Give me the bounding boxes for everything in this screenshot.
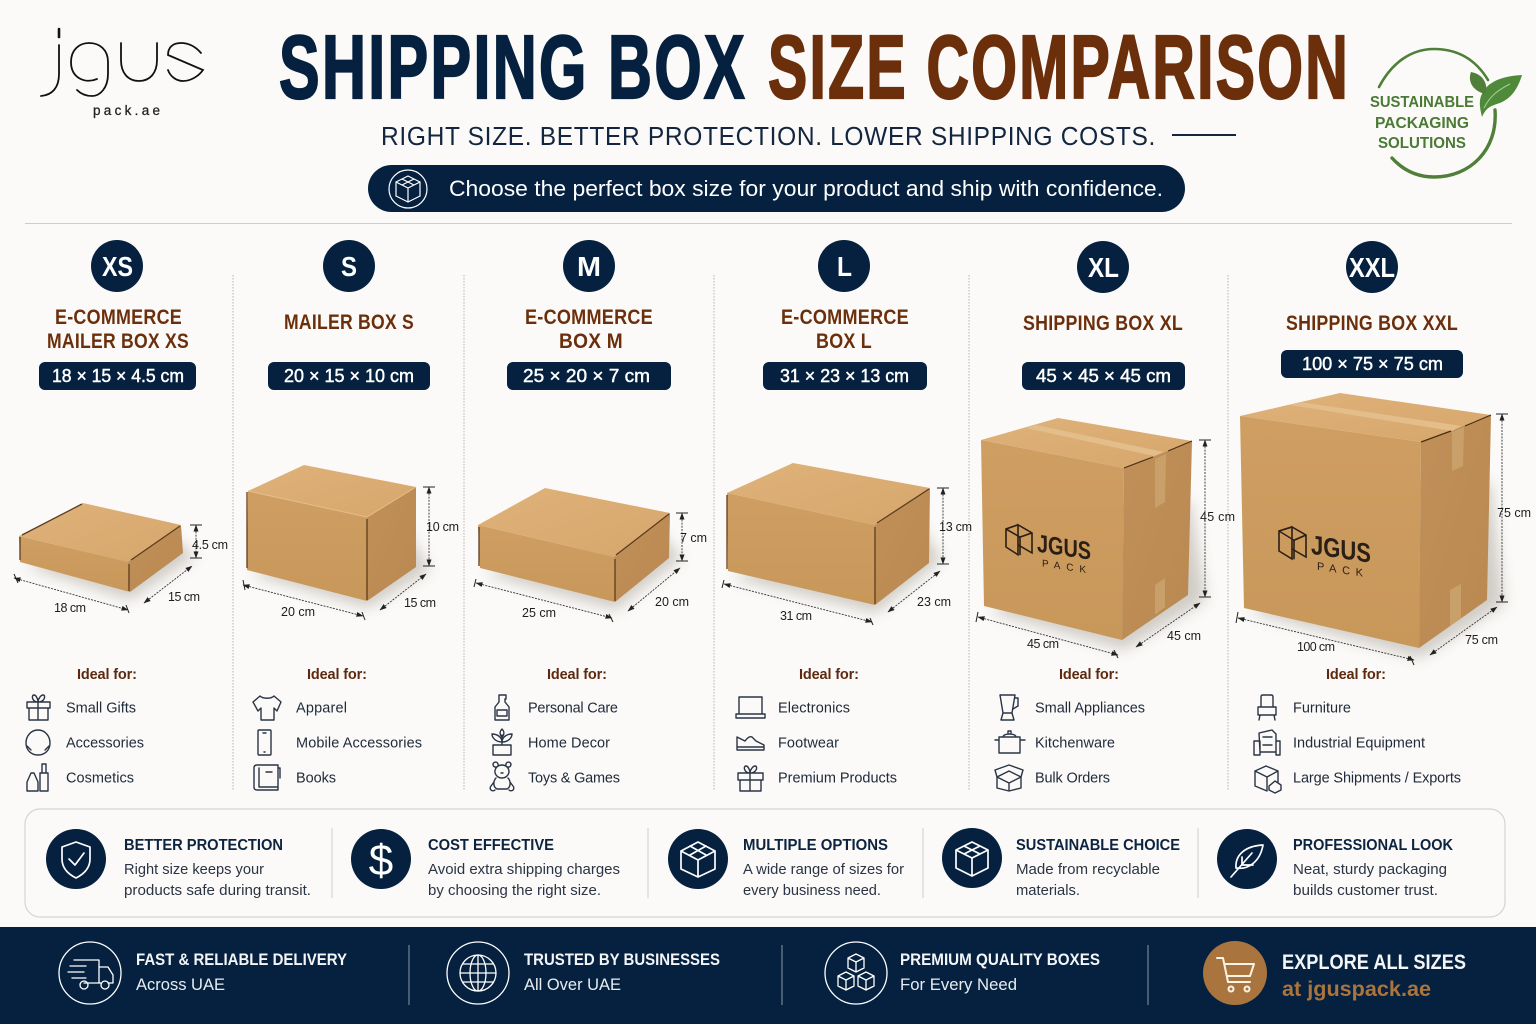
benefit: cost effective: $ (369, 836, 393, 885)
heading XS: E-COMMERCE (55, 306, 182, 329)
icon: shipment boxes (1255, 766, 1281, 793)
icon: t-shirt (253, 696, 281, 720)
title (279, 18, 1350, 118)
ideal for list XS: Cosmetics (66, 770, 134, 786)
panel: S (243, 240, 459, 790)
dimensions pill XL (1022, 362, 1185, 390)
dimensions pill M: 25 × 20 × 7 cm (523, 366, 650, 386)
box XXL: 75 cm (1497, 506, 1531, 520)
panel: XS (14, 240, 228, 791)
ideal for list XS (26, 667, 144, 791)
ideal for list S: Apparel (296, 700, 347, 716)
icon: necklace (26, 730, 50, 755)
benefit: multiple options (668, 829, 904, 899)
footer: delivery: FAST & RELIABLE DELIVERY (136, 950, 348, 969)
footer: delivery: Across UAE (136, 975, 225, 994)
box logo: JGUS (1311, 529, 1371, 569)
logo: jgus pack.ae: pack.ae (93, 103, 160, 118)
panel: L (722, 240, 972, 791)
benefit: cost effective: Avoid extra shipping charges (428, 861, 620, 878)
title: SHIPPING BOX (279, 18, 747, 118)
box S: 20 cm (281, 605, 315, 619)
icon: industrial equipment (1254, 730, 1280, 755)
ideal for list L: Premium Products (778, 770, 897, 786)
benefit: multiple options: MULTIPLE OPTIONS (743, 837, 888, 854)
icon: gift (27, 695, 50, 720)
eco badge: sustainable packaging solutions (1370, 49, 1522, 177)
ideal for list XXL: Large Shipments / Exports (1293, 770, 1461, 786)
icon: box in circle (389, 170, 427, 208)
heading XS (47, 306, 189, 353)
benefit: professional look: builds customer trust. (1293, 882, 1438, 899)
icon: bottle (495, 695, 509, 720)
icon: blender (1000, 695, 1018, 720)
panel: XXL (1236, 241, 1531, 793)
panel: benefits (25, 809, 1505, 917)
box L: 31 cm (780, 609, 812, 623)
tagline pill: Choose the perfect box size for your product and ship with confidence. (449, 176, 1163, 201)
ideal for list XS: Ideal for: (77, 667, 137, 683)
subtitle: RIGHT SIZE. BETTER PROTECTION. LOWER SHIPPING COSTS. (381, 121, 1156, 151)
box XXL (1236, 393, 1531, 665)
icon: book (254, 765, 280, 790)
heading L: E-COMMERCE (781, 306, 909, 329)
box XXL: 75 cm (1465, 633, 1498, 647)
footer bar (0, 927, 1536, 1024)
box M (474, 488, 707, 622)
heading XS: MAILER BOX XS (47, 330, 189, 353)
ideal for list M (490, 667, 620, 791)
size badge L (818, 240, 870, 292)
icon: potted plant (492, 729, 512, 755)
ideal for list L: Electronics (778, 700, 850, 716)
icon: shoe (737, 737, 764, 750)
dimensions pill XL: 45 × 45 × 45 cm (1036, 366, 1171, 386)
icon: laptop (736, 697, 765, 718)
benefit: cost effective: by choosing the right size. (428, 882, 601, 899)
box S: 10 cm (426, 520, 459, 534)
ideal for list S (253, 667, 422, 790)
box S (243, 465, 459, 620)
benefit: cost effective: COST EFFECTIVE (428, 837, 554, 854)
dimensions pill M (507, 362, 671, 390)
box logo: PACK (1042, 558, 1086, 576)
box logo: JGUS (1037, 530, 1091, 566)
benefit: cost effective (351, 829, 620, 899)
icon: phone (258, 730, 271, 755)
ideal for list XXL (1254, 667, 1461, 793)
ideal for list S: Mobile Accessories (296, 736, 422, 752)
benefit: professional look: Neat, sturdy packaging (1293, 861, 1447, 878)
box XS: 4.5 cm (192, 538, 228, 552)
benefit: sustainable choice (942, 828, 1180, 899)
ideal for list M: Ideal for: (547, 667, 607, 683)
ideal for list XL: Ideal for: (1059, 667, 1119, 683)
ideal for list XS: Accessories (66, 736, 144, 752)
benefit: better protection: products safe during transit. (124, 882, 311, 899)
heading M: BOX M (559, 330, 623, 353)
icon: cosmetics (27, 764, 48, 791)
box S: 15 cm (404, 596, 436, 610)
box M: 7 cm (680, 531, 707, 545)
ideal for list M: Toys & Games (528, 770, 620, 786)
heading L (781, 306, 909, 353)
box XL: 45 cm (1027, 637, 1059, 651)
footer: delivery (59, 942, 348, 1004)
ideal for list XXL: Furniture (1293, 700, 1351, 716)
footer: globe: TRUSTED BY BUSINESSES (524, 950, 720, 969)
dimensions pill XS: 18 × 15 × 4.5 cm (52, 366, 184, 386)
box XXL: 100 cm (1297, 640, 1335, 654)
ideal for list XL: Kitchenware (1035, 736, 1115, 752)
benefit: better protection: Right size keeps your (124, 861, 264, 878)
benefit: better protection: BETTER PROTECTION (124, 837, 283, 854)
tagline pill (368, 165, 1185, 212)
benefit: sustainable choice: Made from recyclable (1016, 861, 1160, 878)
eco badge: sustainable packaging solutions: SOLUTIONS (1378, 135, 1466, 152)
heading XXL: SHIPPING BOX XXL (1286, 312, 1458, 335)
box logo (1006, 523, 1091, 577)
eco badge: sustainable packaging solutions: SUSTAINABLE (1370, 94, 1474, 111)
heading XL: SHIPPING BOX XL (1023, 312, 1183, 335)
box XL (976, 418, 1235, 658)
ideal for list S: Books (296, 770, 336, 786)
dimensions pill XXL (1281, 350, 1463, 378)
box L: 13 cm (939, 520, 972, 534)
dimensions pill S (268, 362, 430, 390)
size badge S (323, 240, 375, 292)
ideal for list XS: Small Gifts (66, 700, 136, 716)
panel: M (474, 240, 707, 791)
box L (722, 463, 972, 625)
ideal for list XL: Bulk Orders (1035, 770, 1110, 786)
box XS (14, 503, 228, 615)
ideal for list XL: Small Appliances (1035, 700, 1145, 716)
box logo: PACK (1317, 561, 1364, 580)
footer: globe: All Over UAE (524, 975, 621, 994)
size badge L: L (837, 251, 852, 282)
icon: teddy bear (490, 762, 514, 791)
dimensions pill XS (39, 362, 196, 390)
footer: boxes (825, 942, 1100, 1004)
footer: explore call to action: EXPLORE ALL SIZES (1282, 951, 1466, 974)
box L: 23 cm (917, 595, 951, 609)
ideal for list XXL: Industrial Equipment (1293, 736, 1425, 752)
size badge XXL (1346, 241, 1398, 293)
box M: 25 cm (522, 606, 556, 620)
ideal for list S: Ideal for: (307, 667, 367, 683)
box XL: 45 cm (1200, 510, 1235, 524)
box M: 20 cm (655, 595, 689, 609)
footer: explore call to action (1203, 941, 1466, 1005)
footer: boxes: For Every Need (900, 975, 1017, 994)
dimensions pill L (763, 362, 927, 390)
benefit: professional look: PROFESSIONAL LOOK (1293, 837, 1453, 854)
box XL: 45 cm (1167, 629, 1201, 643)
heading L: BOX L (816, 330, 872, 353)
ideal for list L (736, 667, 897, 791)
size badge M (563, 240, 615, 292)
footer: boxes: PREMIUM QUALITY BOXES (900, 950, 1100, 969)
icon: open box (995, 765, 1023, 791)
benefit: sustainable choice: SUSTAINABLE CHOICE (1016, 837, 1180, 854)
benefit: professional look (1217, 829, 1453, 899)
benefit: multiple options: every business need. (743, 882, 881, 899)
box logo (1279, 524, 1371, 581)
benefit: better protection (46, 829, 311, 899)
size badge XL: XL (1088, 252, 1119, 283)
heading S: MAILER BOX S (284, 311, 414, 334)
size badge S: S (341, 251, 357, 282)
dimensions pill L: 31 × 23 × 13 cm (780, 366, 909, 386)
ideal for list XL (995, 667, 1145, 791)
dimensions pill XXL: 100 × 75 × 75 cm (1302, 354, 1443, 374)
dimensions pill S: 20 × 15 × 10 cm (284, 366, 414, 386)
icon: armchair (1258, 695, 1276, 720)
ideal for list L: Ideal for: (799, 667, 859, 683)
icon: pot (995, 731, 1025, 753)
box XS: 18 cm (54, 601, 86, 615)
eco badge: sustainable packaging solutions: PACKAGING (1375, 115, 1469, 132)
box XS: 15 cm (168, 590, 200, 604)
size badge XS (91, 240, 143, 292)
footer: explore call to action: at jguspack.ae (1282, 978, 1431, 1001)
panel: XL (976, 241, 1235, 791)
ideal for list L: Footwear (778, 736, 839, 752)
size badge M: M (577, 251, 601, 282)
benefit: multiple options: A wide range of sizes for (743, 861, 904, 878)
ideal for list M: Home Decor (528, 736, 610, 752)
ideal for list XXL: Ideal for: (1326, 667, 1386, 683)
benefit: sustainable choice: materials. (1016, 882, 1080, 899)
size badge XXL: XXL (1349, 252, 1395, 283)
footer: globe (447, 942, 720, 1004)
size badge XS: XS (102, 251, 133, 282)
ideal for list M: Personal Care (528, 700, 618, 716)
size badge XL (1077, 241, 1129, 293)
heading M (525, 306, 653, 353)
icon: gift (738, 766, 763, 791)
heading M: E-COMMERCE (525, 306, 653, 329)
logo: jgus pack.ae (41, 29, 203, 118)
